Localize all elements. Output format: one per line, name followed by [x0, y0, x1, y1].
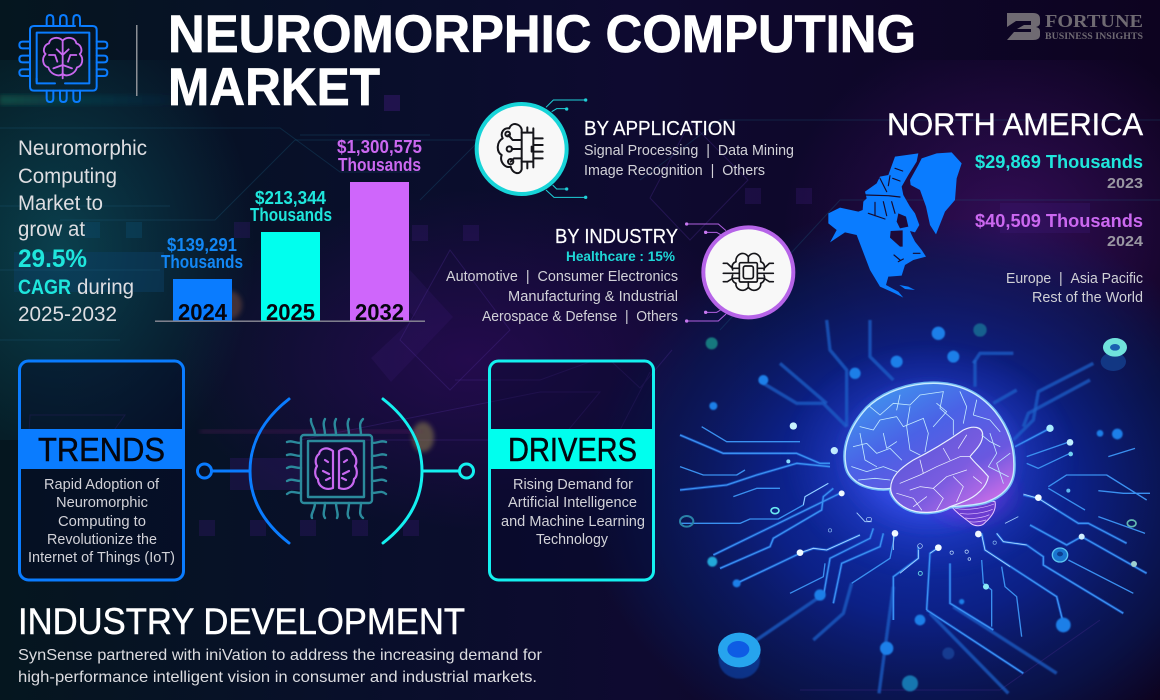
- bar chart: market size: [155, 137, 425, 325]
- text block: CAGR statement: Market to: [18, 191, 103, 215]
- panel: north america: $29,869 Thousands: [975, 152, 1143, 172]
- bar 2024: 2024: [178, 299, 227, 325]
- panel: by industry: BY INDUSTRY: [555, 226, 678, 248]
- ring node: large: [718, 633, 761, 679]
- drivers text: and Machine Learning: [501, 514, 645, 530]
- bar 2032: [337, 137, 422, 325]
- drivers text: Technology: [536, 532, 609, 548]
- text block: CAGR statement: Neuromorphic: [18, 136, 147, 160]
- panel: industry development: INDUSTRY DEVELOPMENT: [18, 601, 465, 642]
- ring node: top right: [1101, 338, 1127, 371]
- panel: north america: Rest of the World: [1032, 290, 1143, 306]
- description: [18, 647, 543, 686]
- trends text: Neuromorphic: [56, 495, 148, 511]
- panel: north america: 2023: [1107, 175, 1143, 192]
- title: NEUROMORPHIC COMPUTING: [168, 5, 916, 64]
- panel: by industry: Automotive | Consumer Electronics: [446, 268, 678, 285]
- panel: industry development: [18, 601, 543, 686]
- bar 2032: 2032: [355, 299, 404, 325]
- text block: CAGR statement: grow at: [18, 217, 85, 241]
- connector: drivers arc: [383, 399, 474, 543]
- panel: trends: [19, 361, 184, 580]
- divider: [136, 25, 138, 96]
- panel: by application: Image Recognition | Others: [584, 162, 765, 179]
- circuit board illustration: [680, 320, 1150, 693]
- text block: CAGR statement: 29.5%: [18, 245, 87, 273]
- drivers banner: DRIVERS: [508, 431, 637, 468]
- description: SynSense partnered with iniVation to address the increasing demand for: [18, 647, 543, 664]
- title: [168, 5, 916, 117]
- panel: by industry: Aerospace & Defense | Others: [482, 308, 678, 325]
- trends text: Revolutionize the: [47, 532, 157, 548]
- bar 2025: Thousands: [250, 205, 332, 225]
- trends text: Rapid Adoption of: [44, 477, 160, 493]
- panel: by industry: Manufacturing & Industrial: [508, 288, 678, 305]
- title: MARKET: [168, 58, 380, 117]
- panel: by industry: Healthcare : 15%: [566, 248, 676, 264]
- panel: drivers: [489, 361, 654, 580]
- text block: CAGR statement: [18, 136, 147, 326]
- panel: north america: [828, 106, 1144, 306]
- glowing nodes: [706, 323, 1123, 691]
- bar 2024: $139,291: [167, 235, 237, 255]
- panel: north america: $40,509 Thousands: [975, 211, 1143, 231]
- trends text: [28, 477, 175, 566]
- drivers text: Artificial Intelligence: [508, 495, 637, 511]
- trends banner: TRENDS: [38, 431, 165, 468]
- logo: Fortune Business Insights: FORTUNE: [1045, 11, 1143, 31]
- heading: NORTH AMERICA: [887, 106, 1143, 142]
- bar 2032: $1,300,575: [337, 137, 422, 157]
- drivers text: Rising Demand for: [513, 477, 633, 493]
- connector: trends arc: [198, 399, 289, 543]
- map: north america: [828, 152, 962, 298]
- bright traces near the brain: [800, 483, 1057, 573]
- glow under circuit traces: [680, 428, 1147, 673]
- panel: by application: BY APPLICATION: [584, 118, 736, 140]
- panel: north america: 2024: [1107, 233, 1144, 250]
- bar 2025: [250, 188, 332, 325]
- icon: central chip with brain: [287, 419, 386, 518]
- panel: by application: [477, 98, 794, 199]
- bar 2025: 2025: [266, 299, 315, 325]
- sharp circuit traces: [680, 427, 1150, 673]
- glowing brain: [832, 375, 1028, 538]
- icon: chip with brain: [19, 15, 107, 102]
- panel: by industry: [446, 222, 793, 325]
- trends text: Computing to: [58, 514, 146, 530]
- bar 2025: $213,344: [255, 188, 326, 208]
- trends text: Internet of Things (IoT): [28, 550, 175, 566]
- bar 2024: [161, 235, 243, 325]
- drivers text: [501, 477, 645, 548]
- text block: CAGR statement: 2025-2032: [18, 302, 117, 326]
- text block: CAGR statement: CAGR: [18, 275, 71, 299]
- blurred far circuit traces: [747, 320, 1093, 693]
- icon: chip brain in purple ring: [685, 222, 793, 323]
- icon: brain chip in cyan ring: [477, 98, 587, 199]
- bar 2032: Thousands: [338, 155, 421, 175]
- description: high-performance intelligent vision in consumer and industrial markets.: [18, 669, 537, 686]
- panel: north america: Europe | Asia Pacific: [1006, 271, 1143, 287]
- text block: CAGR statement: Computing: [18, 164, 117, 188]
- panel: by application: Signal Processing | Data Mining: [584, 142, 794, 159]
- text block: CAGR statement: during: [77, 275, 134, 299]
- ring nodes: small: [680, 508, 1136, 575]
- logo: Fortune Business Insights: BUSINESS INSIGHTS: [1045, 32, 1143, 42]
- bar 2024: Thousands: [161, 252, 243, 272]
- logo: Fortune Business Insights: [1007, 11, 1143, 42]
